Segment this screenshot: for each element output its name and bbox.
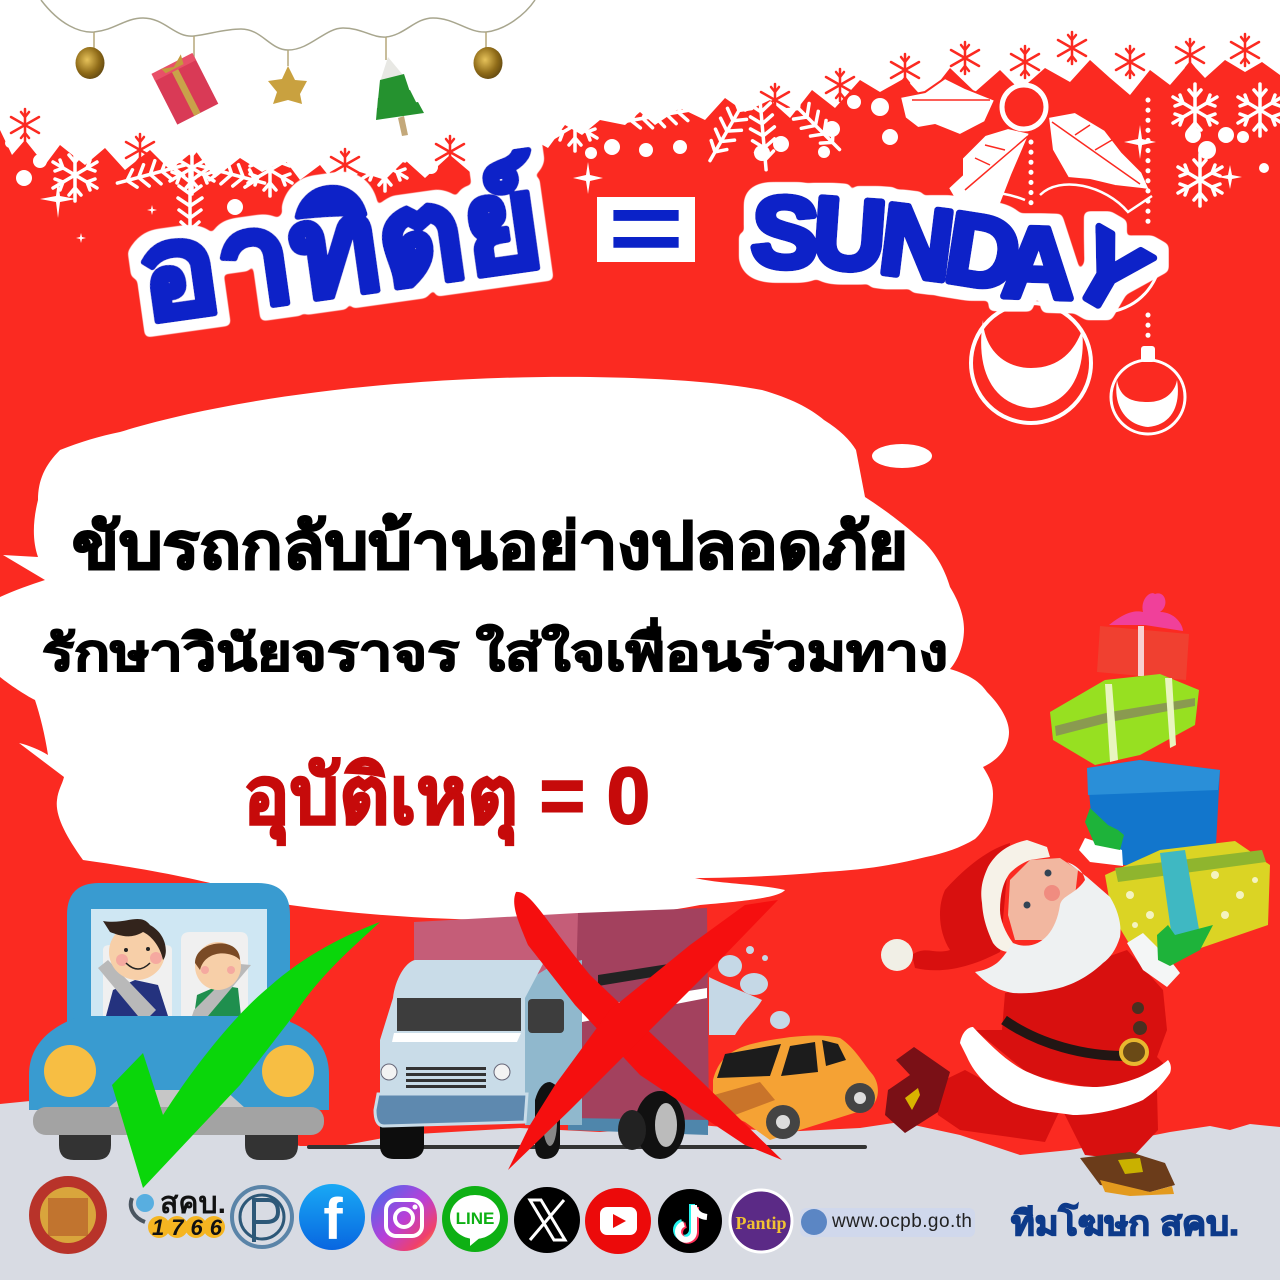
red cross mark	[508, 892, 782, 1170]
side wheel	[535, 1082, 560, 1159]
window	[91, 909, 267, 1016]
bumper	[33, 1107, 324, 1135]
pantip icon	[730, 1190, 792, 1252]
hotline 1766	[131, 1187, 226, 1240]
bumper	[375, 1094, 527, 1126]
rear wheels	[618, 1091, 685, 1159]
side window	[528, 999, 564, 1033]
body	[29, 1018, 329, 1110]
line icon	[442, 1186, 508, 1252]
blue gift	[1087, 760, 1220, 866]
lower arm cuff and glove	[1127, 933, 1180, 987]
holly leaf top	[900, 78, 995, 135]
headline line 2: รักษาวินัยจราจร ใส่ใจเพื่อนร่วมทาง	[42, 618, 948, 681]
front leg	[1060, 1090, 1158, 1160]
red gift	[1097, 626, 1189, 680]
OCPB logo	[232, 1187, 292, 1247]
leaf veins	[912, 100, 1140, 190]
holly leaf right	[1048, 112, 1150, 190]
tree ornament	[376, 57, 424, 136]
belt	[1004, 1020, 1125, 1056]
gift stack	[1050, 593, 1270, 950]
agency seal	[29, 1176, 107, 1254]
X icon	[514, 1187, 580, 1253]
team label: ทีมโฆษก สคบ.	[1011, 1203, 1239, 1243]
website link	[800, 1208, 975, 1237]
cab side	[520, 960, 582, 1125]
small bauble	[1111, 346, 1185, 434]
cab face	[380, 960, 545, 1093]
instagram icon	[371, 1185, 437, 1251]
smoke	[709, 946, 790, 1035]
facebook icon: f	[323, 1187, 343, 1252]
holly leaf left	[948, 128, 1030, 206]
speech cloud	[0, 377, 1009, 920]
green gift	[1050, 674, 1199, 765]
rear leg	[934, 1070, 1060, 1142]
headlights	[44, 1045, 96, 1097]
pink bow	[1109, 593, 1183, 631]
wheels	[59, 1130, 298, 1160]
coat buttons	[1132, 1002, 1144, 1014]
yellow gift	[1105, 841, 1270, 950]
crumpled hood	[714, 1082, 775, 1115]
wire	[41, 0, 535, 50]
road line	[307, 1145, 867, 1149]
snow band at top	[0, 0, 1280, 190]
youtube icon	[585, 1188, 651, 1254]
headline line 3: อุบัติเหตุ = 0	[243, 751, 650, 846]
big bauble	[971, 303, 1091, 423]
red ring ornament	[1002, 85, 1046, 129]
crashing truck	[375, 908, 790, 1159]
cargo floor	[568, 1118, 708, 1135]
holly leaves and hanging baubles	[900, 78, 1185, 434]
rear boot	[885, 1047, 950, 1133]
grille	[406, 1067, 486, 1088]
hotline 1766: 1766	[152, 1215, 223, 1240]
gold ball right	[474, 47, 502, 79]
website link: www.ocpb.go.th	[831, 1211, 972, 1232]
white band	[392, 1033, 521, 1042]
title: SUNDAY: SUNDAY	[749, 175, 1166, 337]
nose	[1044, 885, 1060, 901]
truck lights	[381, 1064, 397, 1080]
snow fringe: snowflakes, dots and sparkles	[5, 32, 1280, 243]
gold star ornament	[268, 66, 307, 104]
Santa Claus	[881, 808, 1213, 1196]
garland with hanging ornaments	[41, 0, 535, 136]
hotline 1766: สคบ.	[160, 1187, 226, 1220]
tiktok icon	[658, 1189, 722, 1253]
line icon: LINE	[456, 1209, 494, 1228]
ground	[0, 1100, 1280, 1280]
cargo front	[414, 913, 578, 1000]
beard	[975, 862, 1121, 993]
orange car	[713, 1035, 878, 1140]
front wheel	[380, 1120, 424, 1159]
face	[1008, 858, 1078, 940]
green check mark	[112, 922, 380, 1188]
headline line 1: ขับรถกลับบ้านอย่างปลอดภัย	[72, 510, 908, 582]
seats	[103, 932, 248, 1016]
torso	[975, 950, 1170, 1090]
leaf outlines	[955, 184, 1152, 212]
eyes	[1044, 870, 1052, 876]
hat pom	[881, 939, 913, 971]
footer logos row	[29, 1176, 1239, 1254]
hat fur trim	[981, 840, 1050, 952]
cargo stripes	[598, 958, 707, 986]
car wheels	[766, 1105, 800, 1139]
driver	[98, 919, 168, 1016]
title: equals sign: =	[608, 172, 684, 284]
gift ornament	[150, 49, 218, 125]
pantip icon: Pantip	[735, 1213, 787, 1233]
hat tail	[912, 843, 1010, 970]
front boot	[1080, 1152, 1175, 1192]
cabin	[67, 883, 290, 1040]
buckle	[1121, 1040, 1147, 1064]
car windows	[717, 1040, 846, 1078]
cargo side	[572, 908, 709, 1125]
small white pill	[872, 444, 932, 468]
raised arm cuff and glove	[1079, 838, 1123, 866]
windshield	[397, 998, 521, 1031]
coat fur hem	[960, 1027, 1171, 1115]
title: Thai word: อาทิตย์	[129, 148, 550, 349]
child	[192, 942, 251, 1016]
bauble behind title	[1110, 250, 1161, 312]
gold ball left	[76, 47, 104, 79]
title: equals sign	[597, 172, 695, 284]
facebook icon	[299, 1184, 365, 1252]
car body	[713, 1035, 878, 1140]
grille	[108, 1090, 245, 1108]
dotted strings	[1031, 100, 1148, 345]
blue family car	[29, 883, 329, 1160]
